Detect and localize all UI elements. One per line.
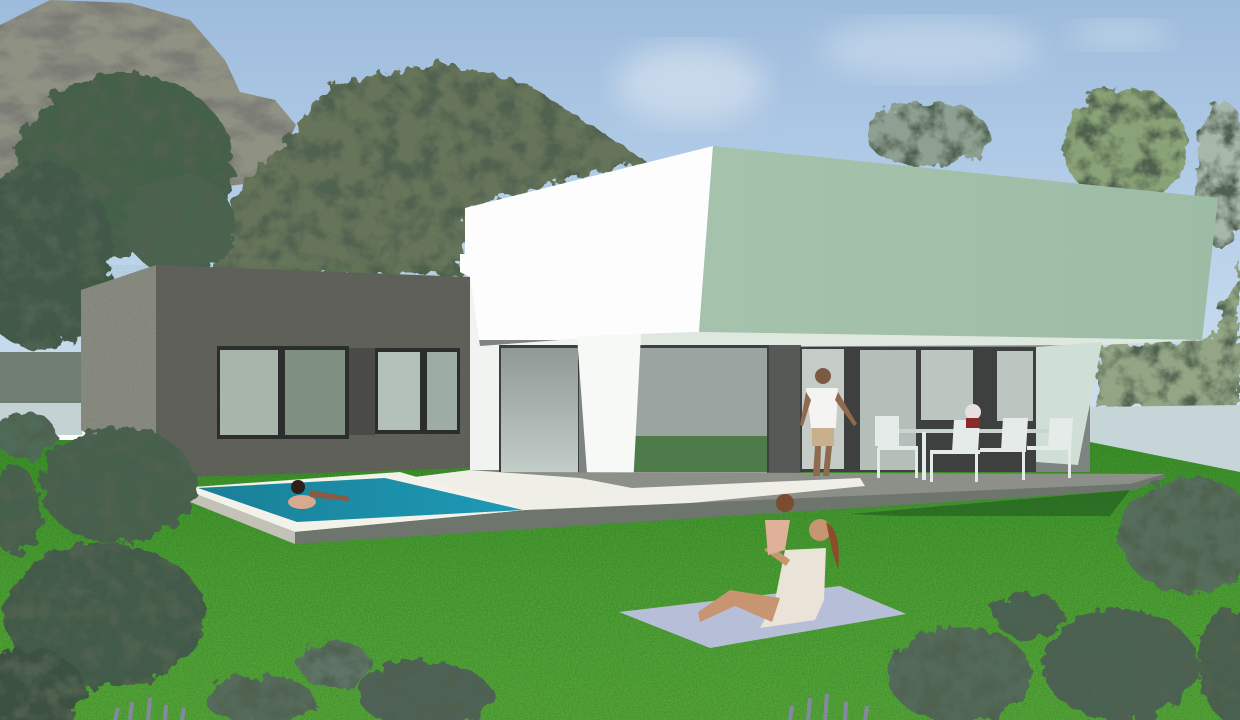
- lawn: [0, 440, 1240, 720]
- pine tree behind house: [215, 62, 645, 275]
- foreground shrubs right: [888, 477, 1240, 720]
- pool: [180, 472, 1165, 544]
- mountain: [0, 0, 296, 220]
- terrace slab: [390, 470, 1165, 510]
- man at door: [800, 368, 857, 476]
- white angled column: [577, 334, 641, 487]
- foreground tree left: [0, 411, 205, 720]
- glazing: [499, 345, 1036, 483]
- dining set: [875, 404, 1073, 482]
- terrace ceiling and back wall: [470, 276, 1202, 472]
- blanket: [619, 586, 906, 648]
- lavender: [115, 694, 867, 720]
- foreground shrubs bottom centre: [205, 641, 491, 720]
- annex windows: [217, 346, 460, 439]
- mother and baby: [698, 494, 839, 628]
- sky: [0, 0, 1240, 420]
- swimmer in pool: [288, 480, 350, 509]
- green upper volume: [699, 146, 1218, 340]
- grey annex: [81, 265, 471, 478]
- fence and wall left: [0, 352, 82, 435]
- tree left: [0, 73, 235, 350]
- shadow on lawn: [850, 490, 1130, 516]
- trees behind right wall: [1095, 260, 1240, 410]
- right garden wall: [1090, 405, 1240, 472]
- background trees right: [866, 87, 1240, 250]
- white volume left side: [460, 146, 713, 470]
